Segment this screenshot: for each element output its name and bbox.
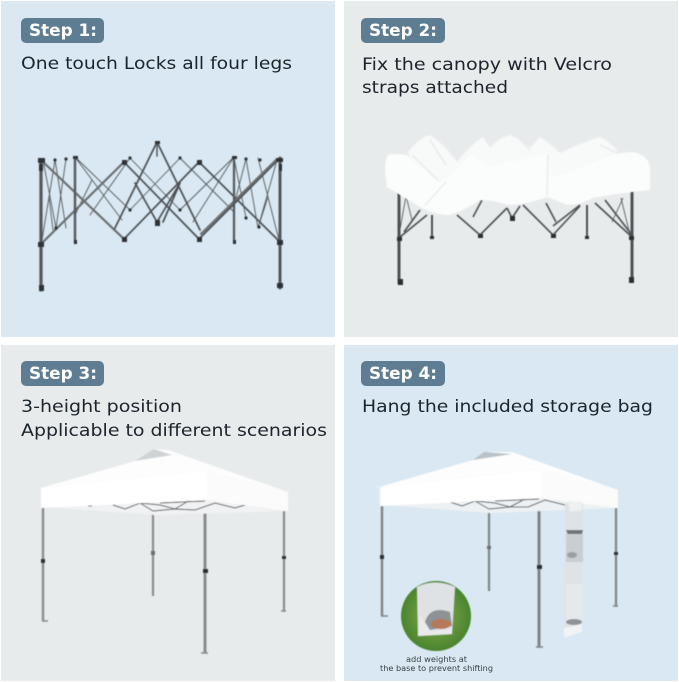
leg height locks <box>41 551 286 573</box>
front canopy drape <box>385 152 650 215</box>
panel: step 4 <box>344 345 678 681</box>
step 4 badge <box>361 361 445 386</box>
step 3 instruction <box>21 397 327 440</box>
inset caption <box>380 655 493 673</box>
underside of canopy <box>44 499 288 515</box>
vent top <box>135 449 172 461</box>
step 3 instruction: Applicable to different scenarios <box>21 421 327 440</box>
canopy roof <box>41 449 288 492</box>
canopy legs <box>381 498 618 647</box>
vent top <box>473 452 512 460</box>
hanging storage bag <box>564 500 583 638</box>
underside of canopy <box>382 497 618 513</box>
truss under canopy <box>450 499 565 509</box>
canopy front valance <box>41 471 207 508</box>
canopy side valance <box>207 471 288 511</box>
step 3 badge: Step 3: <box>29 364 97 384</box>
illustration: frame with draped canopy <box>385 135 650 285</box>
step 2 instruction: straps attached <box>362 78 508 97</box>
step 2 badge <box>361 18 445 43</box>
step 1 badge: Step 1: <box>29 21 97 41</box>
illustration: assembled white canopy <box>41 449 288 653</box>
step 1 badge <box>21 18 104 43</box>
step 3 instruction: 3-height position <box>21 397 182 416</box>
inset: weights in bag base <box>401 581 471 651</box>
step 4 instruction: Hang the included storage bag <box>362 397 653 416</box>
canopy side valance <box>541 469 618 508</box>
panel: step 2 <box>344 1 678 337</box>
canopy roof <box>379 452 618 490</box>
illustration: folding steel frame <box>38 141 283 291</box>
panel: step 1 <box>1 1 335 337</box>
leg height locks <box>380 546 618 569</box>
truss under canopy <box>88 500 245 511</box>
canopy front valance <box>380 469 542 506</box>
illustration: canopy with storage bag <box>379 452 618 647</box>
step 3 badge <box>21 361 104 386</box>
inset caption: the base to prevent shifting <box>380 664 493 673</box>
step 1 instruction: One touch Locks all four legs <box>21 54 292 73</box>
step 4 badge: Step 4: <box>369 364 437 384</box>
frame under the canopy <box>397 190 634 285</box>
canopy legs <box>42 500 286 653</box>
back canopy folds <box>408 135 620 185</box>
panel: step 3 <box>1 345 335 681</box>
step 2 instruction: Fix the canopy with Velcro <box>362 55 612 74</box>
step 2 instruction <box>362 55 612 97</box>
canopy fold shading <box>412 140 617 205</box>
inset caption: add weights at <box>406 655 467 664</box>
step 2 badge: Step 2: <box>369 21 437 41</box>
